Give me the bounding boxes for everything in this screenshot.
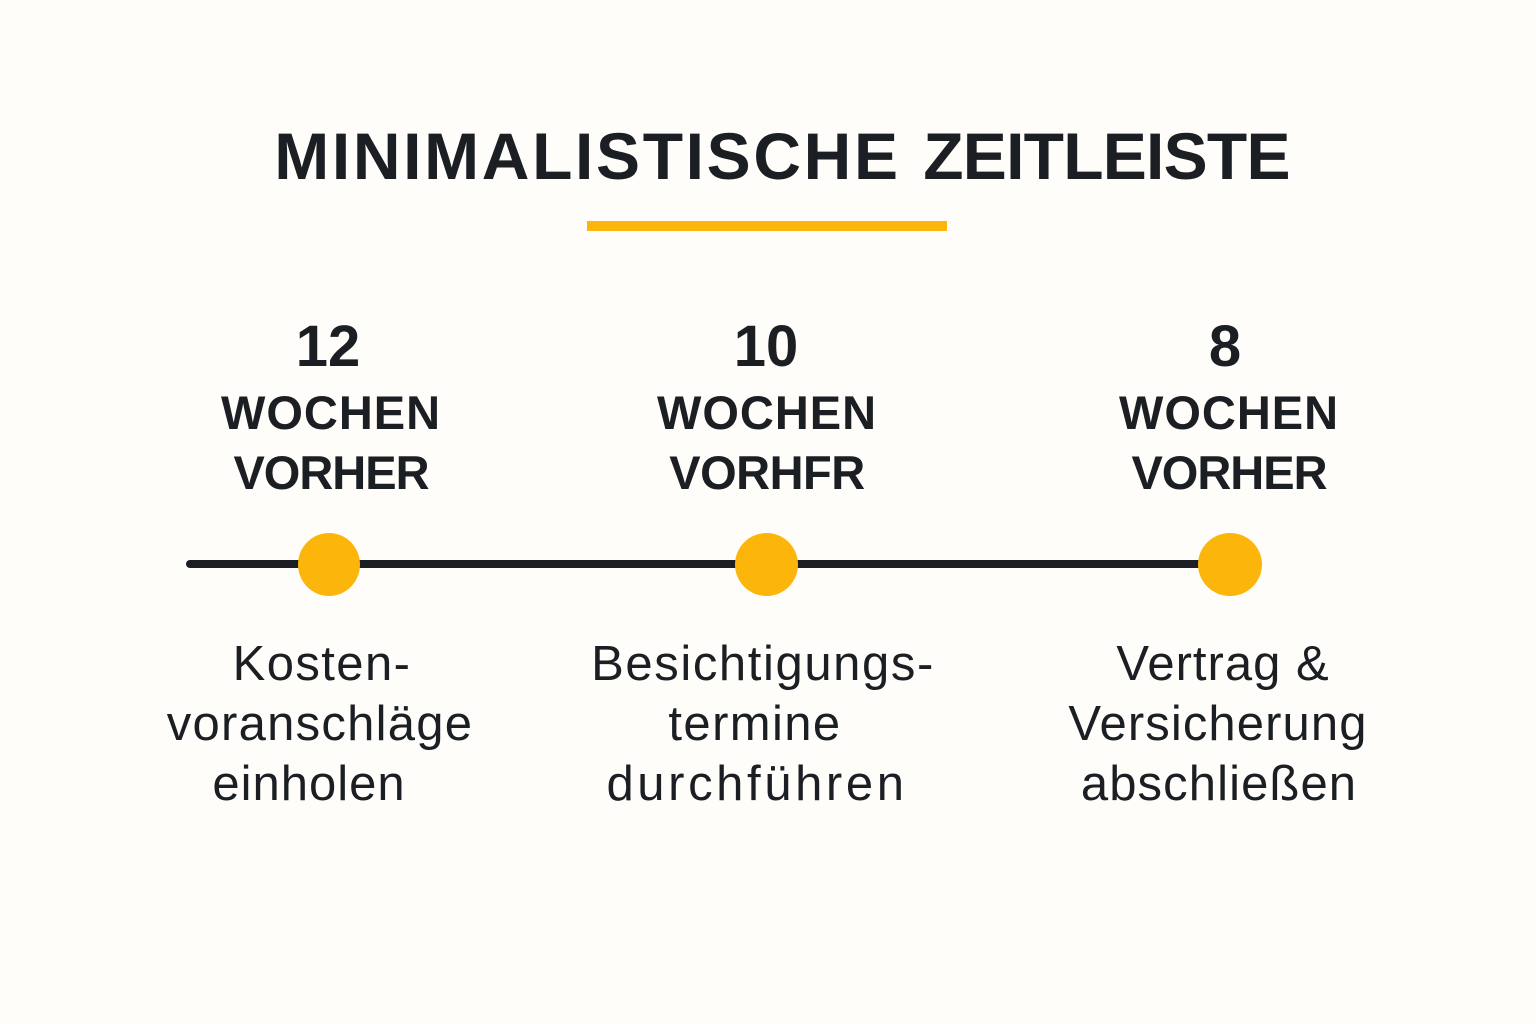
line 1: Kosten- (233, 637, 411, 691)
description: Besichtigungstermine durchführen (591, 637, 935, 811)
description: Kostenvoranschläge einholen (167, 637, 473, 811)
label: 12 Wochen vorher: WOCHEN (221, 386, 441, 439)
label: 8 Wochen vorher: VORHER (1131, 446, 1327, 499)
marker: 8 weeks (1198, 533, 1262, 596)
description: Vertrag & Versicherung abschließen (1068, 637, 1368, 811)
line 3: einholen (212, 757, 406, 811)
line 1: Vertrag & (1116, 637, 1330, 691)
line 2: termine (668, 697, 842, 751)
line 2: Versicherung (1068, 697, 1368, 751)
label: 8 Wochen vorher: WOCHEN (1119, 386, 1339, 439)
label: 8 Wochen vorher (1119, 386, 1339, 499)
marker: 10 weeks (735, 533, 798, 596)
timeline (186, 533, 1262, 596)
timeline line (186, 560, 1216, 568)
number: 12: 12 (296, 314, 360, 379)
marker: 12 weeks (298, 533, 360, 596)
line 3: abschließen (1081, 757, 1357, 811)
title: MINIMALISTISCHE ZEITLEISTE (274, 119, 1290, 193)
number: 10: 10 (734, 314, 798, 379)
line 1: Besichtigungs- (591, 637, 935, 691)
line 3: durchführen (606, 757, 908, 811)
label: 10 Wochen vorher (657, 386, 877, 499)
label: 10 Wochen vorher: VORHFR (669, 446, 865, 499)
number: 8: 8 (1209, 314, 1241, 379)
label: 10 Wochen vorher: WOCHEN (657, 386, 877, 439)
label: 12 Wochen vorher (221, 386, 441, 499)
title underline (587, 221, 947, 231)
label: 12 Wochen vorher: VORHER (233, 446, 429, 499)
line 2: voranschläge (167, 697, 473, 751)
